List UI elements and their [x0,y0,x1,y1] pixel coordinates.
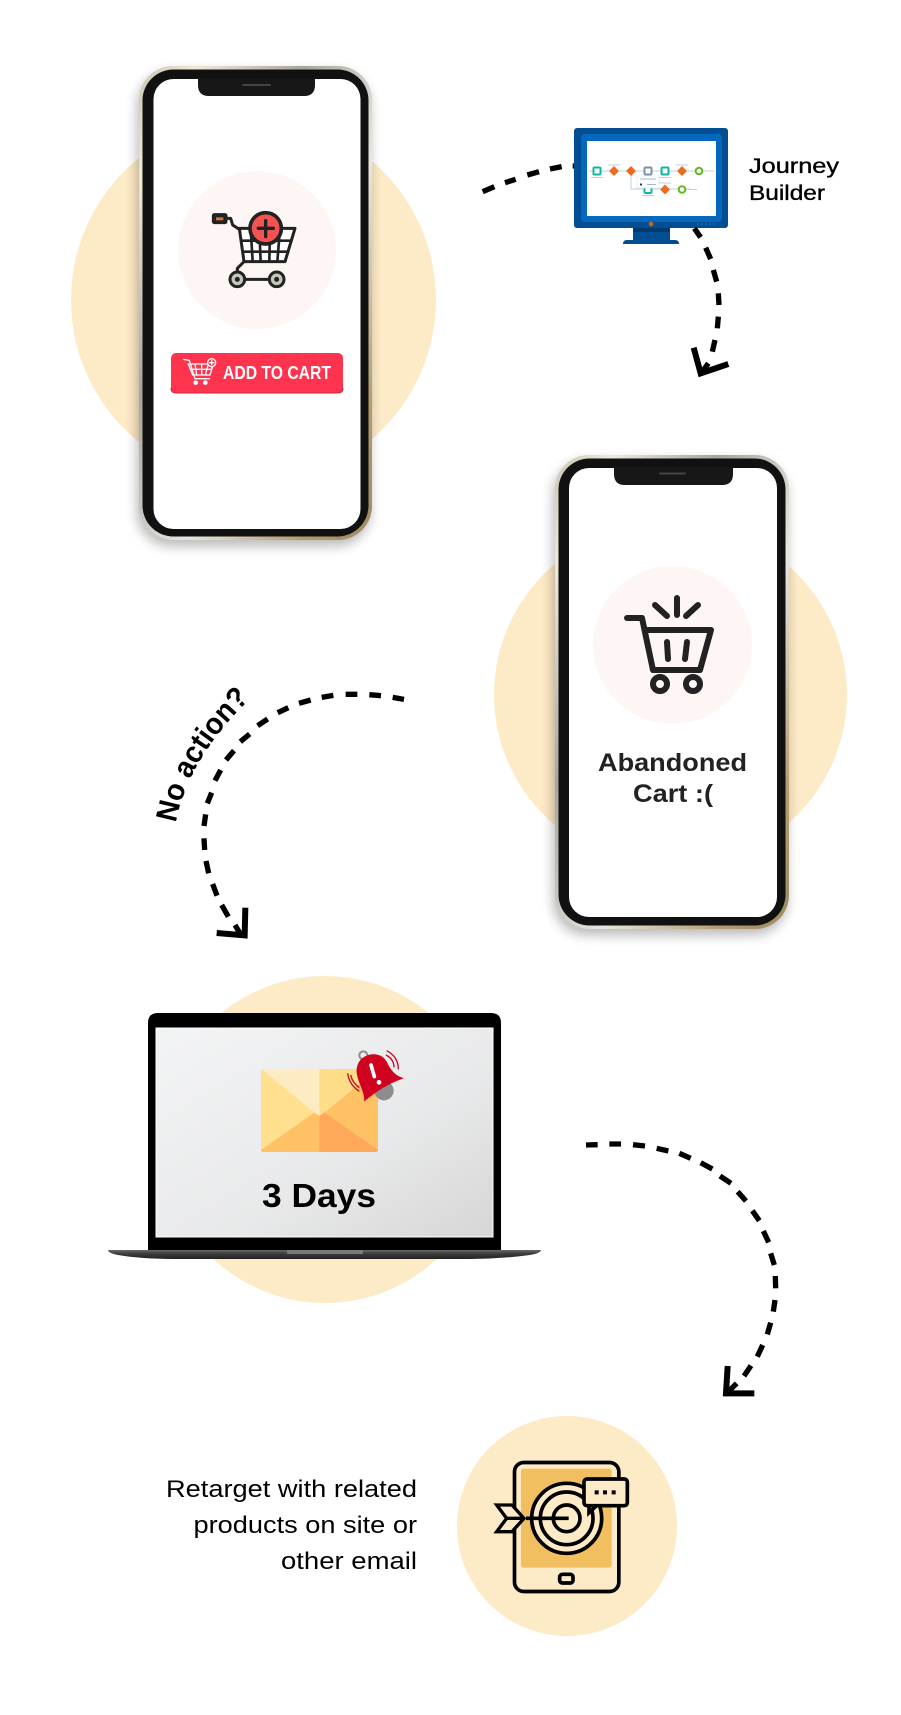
arrow: phone to journey builder [483,166,576,192]
label: journey builder: Journey [749,155,840,178]
arrow: abandoned cart to email [204,694,404,935]
text: retarget description: Retarget with related [166,1476,417,1503]
phone: abandoned cart [553,455,789,935]
phone notch [198,78,315,96]
icon: abandoned cart [627,598,711,691]
text: retarget description: products on site or [194,1512,417,1539]
button label: ADD TO CART [223,363,331,383]
label: journey builder: Builder [749,182,825,205]
laptop: three days [108,1013,541,1259]
text: retarget description [166,1476,417,1575]
background circle: add to cart [71,118,436,482]
icon: tablet with target [497,1462,627,1591]
journey flow diagram [589,165,714,196]
background circle: retarget [457,1416,677,1636]
icon: cart with plus [213,213,295,287]
monitor: journey builder [574,128,728,244]
label: three days: 3 Days [262,1177,376,1214]
add to cart button [171,353,343,393]
arrow: journey builder to abandoned cart [694,228,728,373]
icon: envelope [261,1069,378,1152]
icon: white cart [183,359,216,384]
text: retarget description: other email [281,1548,417,1575]
label: abandoned cart: Abandoned [598,749,747,777]
pink icon circle [178,171,336,329]
pink icon circle [593,566,752,724]
background circle: abandoned cart [494,522,847,868]
phone: add to cart [137,66,372,546]
label: abandoned cart [598,749,747,808]
label: abandoned cart: Cart :( [633,780,714,808]
arrow: email to retarget [586,1144,776,1393]
label: no action: No action? [156,688,245,822]
phone notch [614,467,733,485]
background circle: three days [162,976,488,1303]
icon: alert bell [348,1051,404,1102]
label: journey builder [749,155,840,205]
laptop base [108,1250,541,1259]
